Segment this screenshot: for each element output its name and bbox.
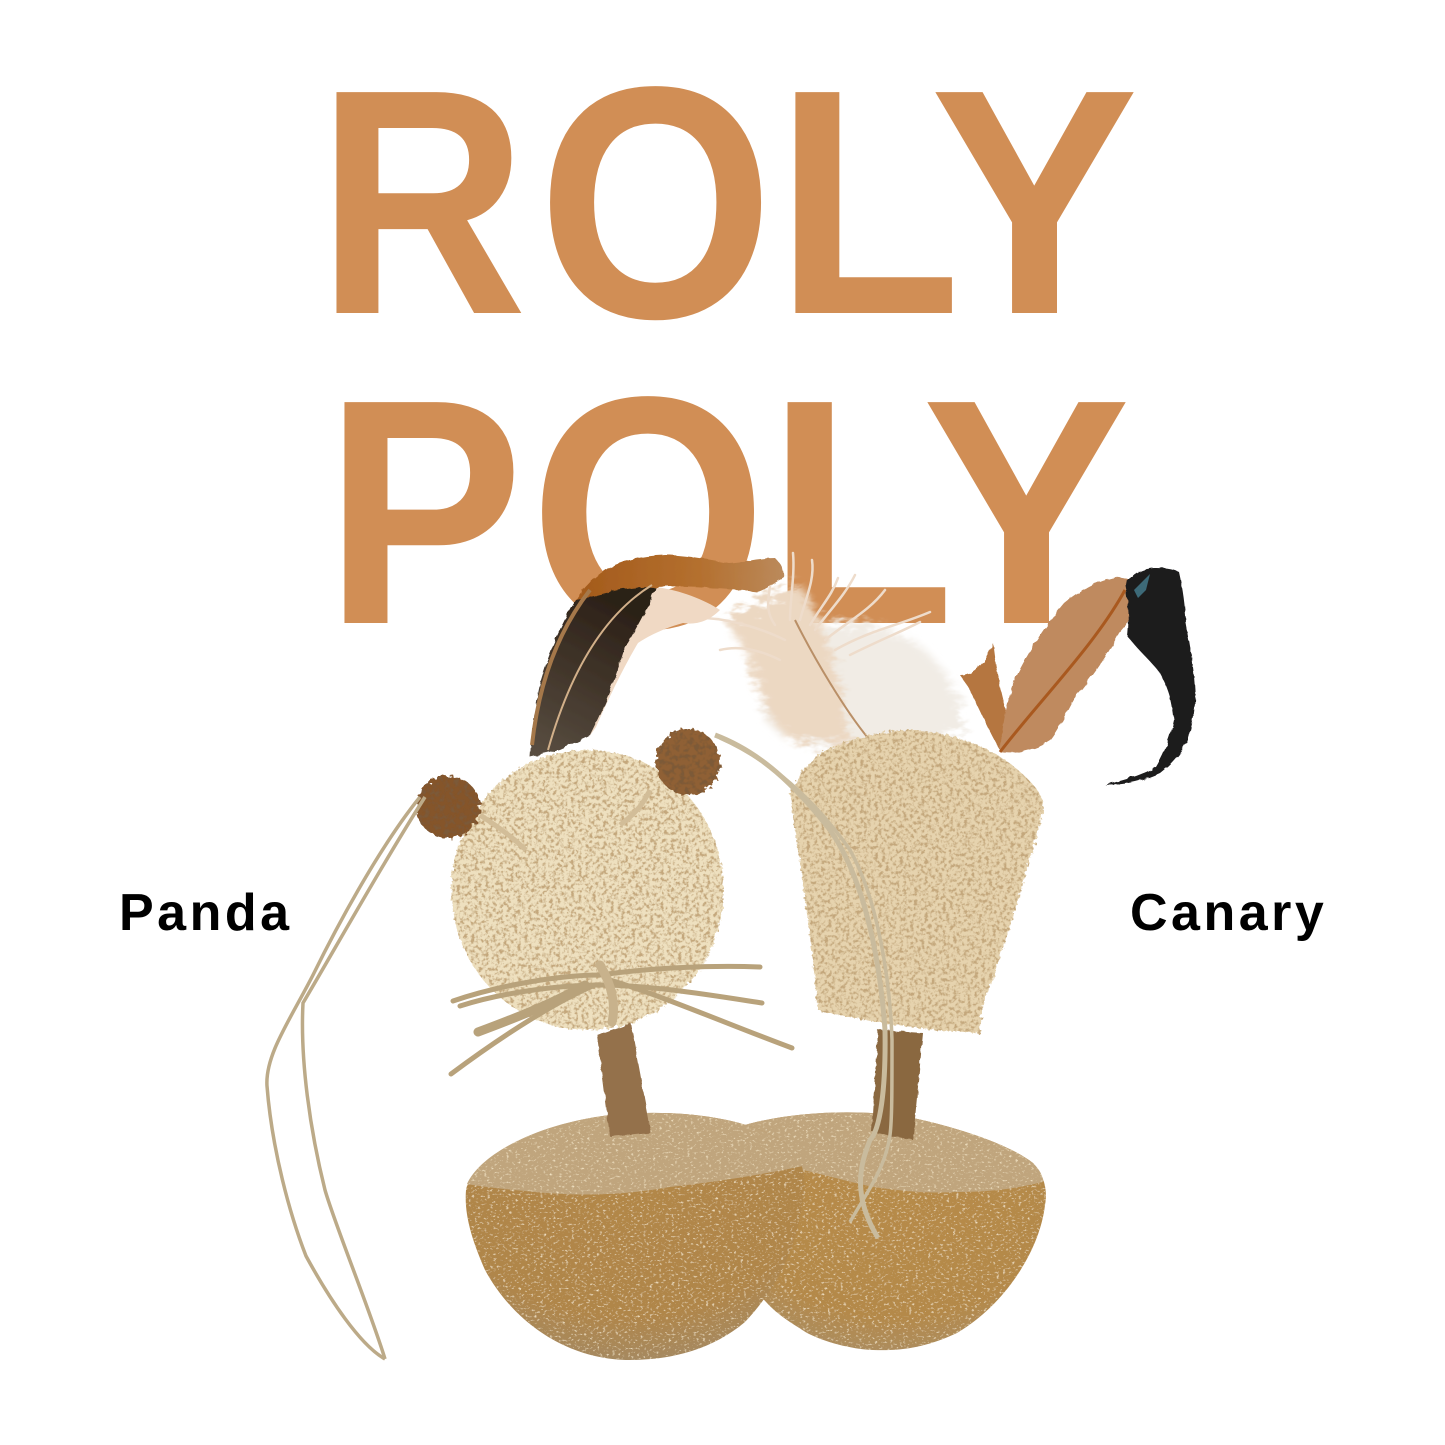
cream feather barbs	[589, 587, 720, 737]
right ear nut	[656, 729, 720, 795]
feather tan rim	[532, 590, 590, 745]
panda base	[466, 1113, 804, 1360]
canary base top face	[745, 1112, 1043, 1193]
hanging strings	[267, 735, 892, 1359]
black right feather	[1105, 568, 1195, 785]
whiskers bow	[451, 965, 792, 1074]
feather quill	[548, 585, 652, 750]
dark left feather	[530, 585, 656, 757]
canary stem	[872, 1030, 923, 1140]
blue feather fleck	[1134, 574, 1150, 598]
canary base	[745, 1112, 1046, 1350]
panda stem	[597, 1023, 651, 1137]
title: ROLY POLY: Y	[930, 23, 1139, 382]
feather fluff strands	[706, 553, 930, 660]
canary loofah body	[790, 730, 1043, 1033]
ear strings on face	[480, 790, 650, 850]
title: ROLY POLY: R	[317, 23, 527, 381]
title: ROLY POLY: P	[324, 332, 524, 691]
orange feather top	[576, 555, 784, 600]
title: ROLY POLY: O	[530, 329, 767, 698]
white feather quill	[795, 620, 868, 738]
label: Panda: Panda	[119, 884, 293, 942]
title: ROLY POLY: Y	[922, 333, 1131, 692]
panda base top face	[467, 1113, 803, 1195]
title: ROLY POLY: O	[538, 19, 774, 388]
brown side tuft	[960, 643, 1012, 750]
label: Canary: Canary	[1130, 884, 1327, 942]
title: ROLY POLY: L	[775, 24, 961, 382]
title: ROLY POLY: L	[767, 333, 955, 691]
product photo: canary toy	[706, 553, 1195, 1350]
product photo: panda toy	[267, 555, 892, 1360]
panda loofah face	[452, 750, 724, 1030]
white fluffy feather	[725, 585, 962, 750]
left ear nut	[416, 776, 480, 838]
title: ROLY POLY	[317, 19, 1139, 698]
brown right feather	[1000, 577, 1151, 753]
